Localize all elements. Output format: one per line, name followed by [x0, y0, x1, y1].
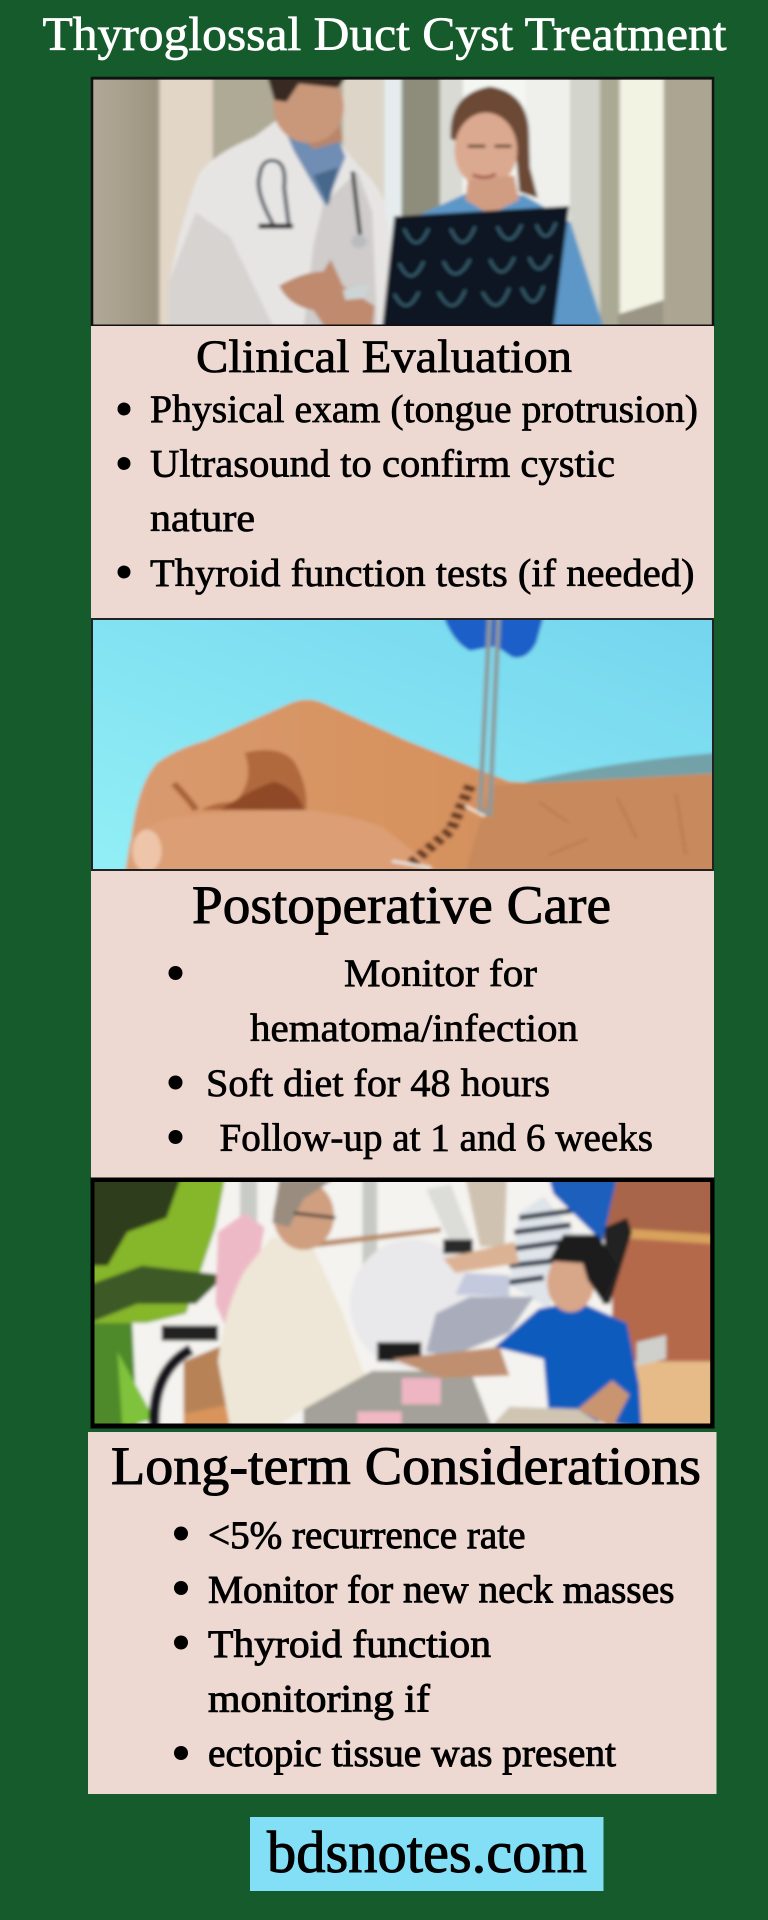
photo: doctor and nurse reviewing x-ray — [88, 71, 718, 329]
exercise machine — [154, 1184, 473, 1428]
bullet list: postoperative care: Soft diet for 48 hours — [206, 1062, 550, 1105]
bullet list: postoperative care: Monitor for — [344, 952, 537, 995]
elderly patient — [218, 1180, 492, 1428]
bullet list: long-term considerations: ectopic tissue was present — [208, 1732, 616, 1775]
bullet list: postoperative care: hematoma/infection — [250, 1007, 578, 1050]
bullet list: clinical evaluation: Thyroid function tests (if needed) — [150, 552, 694, 595]
panel: postoperative care — [91, 871, 714, 1178]
bullet list: long-term considerations: Monitor for new neck masses — [208, 1568, 674, 1612]
x-ray film — [382, 206, 569, 329]
bullet list: clinical evaluation — [118, 388, 698, 595]
panel: clinical evaluation — [91, 326, 714, 618]
plant — [89, 1177, 225, 1428]
nurse (hair, face, scrubs) — [416, 87, 603, 329]
website badge: bdsnotes.com — [267, 1819, 587, 1885]
bullet list: clinical evaluation: Physical exam (tongue protrusion) — [150, 388, 698, 431]
photo: sutured hand with tweezers — [87, 616, 718, 874]
bullet list: long-term considerations: monitoring if — [208, 1678, 430, 1720]
title: Thyroglossal Duct Cyst Treatment — [42, 8, 727, 61]
heading: clinical evaluation: Clinical Evaluation — [196, 331, 572, 383]
bullet list: postoperative care — [168, 952, 653, 1160]
bullet list: postoperative care: Follow-up at 1 and 6 weeks — [220, 1116, 653, 1160]
heading: long-term considerations: Long-term Considerations — [111, 1436, 701, 1496]
doctor (coat, shirt, head, hand) — [169, 71, 392, 329]
woman exercising — [377, 1177, 632, 1361]
bullet list: long-term considerations: Thyroid function — [208, 1623, 491, 1666]
bullet list: clinical evaluation: nature — [150, 497, 255, 540]
heading: postoperative care: Postoperative Care — [192, 875, 611, 935]
panel: long-term considerations — [88, 1432, 716, 1794]
photo: rehabilitation session — [89, 1177, 715, 1428]
therapist in blue polo — [392, 1235, 666, 1428]
bullet list: clinical evaluation: Ultrasound to confirm cystic — [150, 442, 615, 486]
bullet list: long-term considerations — [174, 1514, 674, 1775]
bullet list: long-term considerations: <5% recurrence rate — [208, 1514, 526, 1557]
